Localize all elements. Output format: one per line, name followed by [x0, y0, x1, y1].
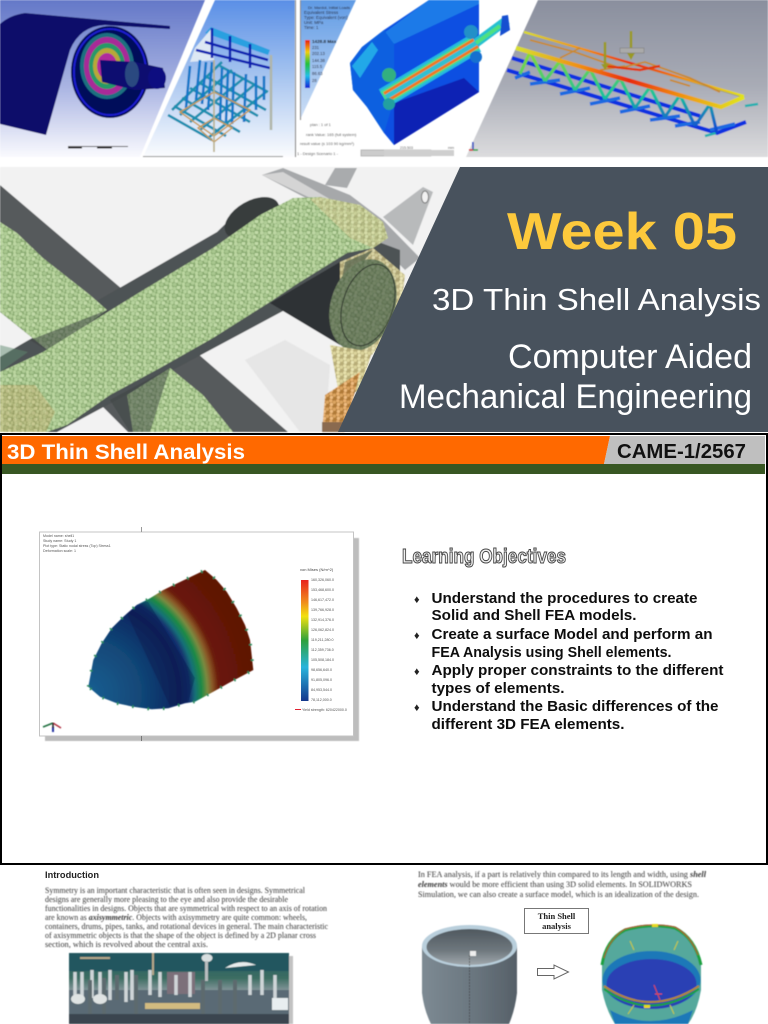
figure: shell stress contour plot: Study name: Study 1: [43, 539, 76, 543]
image: stress legend and contour cylinder: 231: [312, 45, 320, 50]
text block: symmetry paragraph: are known as axisymmetric. Objects with axisymmetry are quite common: wheels,: [45, 912, 307, 922]
stress colour legend: 146,617,472.0: [311, 598, 334, 602]
axis triad: [43, 723, 61, 732]
panel: introduction page: [45, 869, 707, 1024]
stress colour legend: 153,468,600.0: [311, 588, 334, 592]
stress colour legend: 78,112,000.0: [311, 698, 332, 702]
image: stress legend and contour cylinder: 86.63: [312, 71, 323, 76]
stress colour legend: Yield strength: 620422000.0: [302, 708, 347, 712]
title: week number: Week 05: [507, 203, 737, 261]
text block: objectives list: different 3D FEA elements.: [432, 717, 624, 733]
stress colour legend: von Mises (N/m^2): [300, 567, 334, 572]
text block: objectives list: Create a surface Model and perform an: [432, 627, 712, 643]
stress colour legend: 119,211,280.0: [311, 638, 333, 642]
image: stress legend and contour cylinder: [295, 0, 510, 157]
text block: objectives list: Solid and Shell FEA models.: [432, 608, 636, 624]
image: frame structure stress plot: [143, 0, 295, 157]
header bar: green strip: [2, 464, 765, 474]
image: stress legend and contour cylinder: rank Value: 165 (full system): [306, 132, 357, 137]
image: particle conveyor simulation: [0, 167, 470, 432]
panel: hero conveyor simulation: [0, 167, 768, 432]
image: stress legend and contour cylinder: 28: [312, 78, 317, 83]
heading: introduction: Introduction: [45, 870, 99, 881]
subtitle: course name line one: Computer Aided: [508, 338, 752, 376]
text block: symmetry paragraph: designs are generally more pleasing to the eye and also provide the desirable: [45, 894, 288, 904]
callout: thin shell analysis box: Thin Shell: [538, 911, 576, 921]
text block: shell elements paragraph: elements would be more efficient than using 3D solid elements. In SOLIDWORKS: [418, 879, 692, 889]
callout: thin shell analysis box: analysis: [542, 921, 572, 931]
figure: meshed shell model: [602, 924, 701, 1024]
callout: thin shell analysis box: [524, 908, 588, 934]
figure: shell stress contour plot: Deformation scale: 1: [43, 549, 76, 553]
image: truss deformation plot: [466, 0, 768, 157]
stress colour legend: [295, 567, 347, 712]
text block: objectives list: ♦: [414, 666, 420, 678]
course code: CAME-1/2567: [617, 441, 746, 463]
text block: objectives list: [414, 591, 724, 733]
figure: shell stress contour plot: [40, 527, 359, 741]
text block: objectives list: ♦: [414, 702, 420, 714]
stress colour legend: 112,359,736.0: [311, 648, 334, 652]
stress colour legend: 105,508,184.0: [311, 658, 334, 662]
text block: symmetry paragraph: of axisymmetric objects is that the shape of the object is defined by a 2D planar cross: [45, 930, 317, 940]
panel: lecture slide: [1, 434, 767, 864]
slide heading: 3D Thin Shell Analysis: [7, 441, 245, 464]
text block: objectives list: types of elements.: [432, 681, 564, 697]
text block: objectives list: ♦: [414, 594, 420, 606]
subtitle: course name line two: Mechanical Engineering: [399, 378, 752, 416]
text block: shell elements paragraph: In FEA analysis, if a part is relatively thin compared to its length and width, using shell: [418, 869, 707, 879]
figure: solid cup model: [422, 925, 517, 1024]
text block: symmetry paragraph: Symmetry is an important characteristic that is often seen in designs. Symmetrical: [45, 885, 305, 895]
stress colour legend: 91,805,096.0: [311, 678, 332, 682]
header bar: orange: [2, 436, 610, 464]
image: refinery photo: [69, 953, 293, 1024]
stress colour legend: 84,953,544.0: [311, 688, 332, 692]
contour dome shape: [88, 570, 253, 709]
text block: objectives list: FEA Analysis using Shell elements.: [432, 645, 672, 661]
image: stress legend and contour cylinder: 202.13: [312, 51, 325, 56]
stress colour legend: 98,656,640.0: [311, 668, 332, 672]
image: stress legend and contour cylinder: Time: 1: [304, 25, 319, 30]
text block: symmetry paragraph: section, which is revolved about the central axis.: [45, 939, 208, 949]
text block: symmetry paragraph: functionalities in designs. Objects that are symmetrical with respect to an axis of rotation: [45, 903, 328, 913]
image: stress legend and contour cylinder: plan : 1 of 1: [310, 122, 332, 127]
image: stress legend and contour cylinder: 1428.8 Max: [312, 39, 337, 44]
image: stress legend and contour cylinder: 215.503: [400, 146, 413, 150]
image: stress legend and contour cylinder: Equivalent Stress: [304, 10, 339, 15]
image: stress legend and contour cylinder: Dr. Mardol, Initial Loads: [308, 5, 350, 10]
text block: objectives list: Understand the procedures to create: [432, 591, 698, 607]
stress colour legend: 132,914,376.0: [311, 618, 334, 622]
text block: objectives list: Apply proper constraints to the different: [432, 663, 724, 679]
panel: dark title block: [338, 167, 768, 432]
text block: objectives list: Understand the Basic differences of the: [432, 699, 718, 715]
image: stress legend and contour cylinder: result value (s 103 90 kg/mm²): [300, 141, 355, 146]
subtitle: topic: 3D Thin Shell Analysis: [432, 282, 761, 317]
text block: shell elements paragraph: [418, 869, 707, 899]
stress colour legend: 139,766,928.0: [311, 608, 334, 612]
image: drum finite element mesh: [0, 0, 205, 157]
image: stress legend and contour cylinder: Unit: MPa: [304, 20, 324, 25]
figure: shell stress contour plot: Model name: shell1: [43, 534, 74, 538]
panel: top image strip: [0, 0, 768, 157]
text block: symmetry paragraph: [45, 885, 328, 949]
image: stress legend and contour cylinder: 144.38: [312, 58, 325, 63]
image: stress legend and contour cylinder: Type: Equivalent (von): [304, 15, 348, 20]
image: stress legend and contour cylinder: 115.5: [312, 64, 323, 69]
heading: learning objectives: Learning Objectives: [402, 546, 566, 568]
image: stress legend and contour cylinder: 1 - Design Scenario 1 -: [297, 151, 339, 156]
header bar: grey course tag: [604, 436, 765, 464]
stress colour legend: 126,062,824.0: [311, 628, 334, 632]
text block: shell elements paragraph: Simulation, we can also create a surface model, which is an idealization of the design.: [418, 889, 699, 899]
text block: objectives list: ♦: [414, 630, 420, 642]
arrow: solid to shell: [538, 965, 568, 979]
stress colour legend: 160,326,060.0: [311, 578, 334, 582]
image: stress legend and contour cylinder: mm: [448, 146, 454, 150]
figure: shell stress contour plot: Plot type: Static nodal stress (Top) Stress1: [43, 544, 111, 548]
text block: symmetry paragraph: containers, drums, pipes, tanks, and rotational devices in general. The main characteristic: [45, 921, 328, 931]
